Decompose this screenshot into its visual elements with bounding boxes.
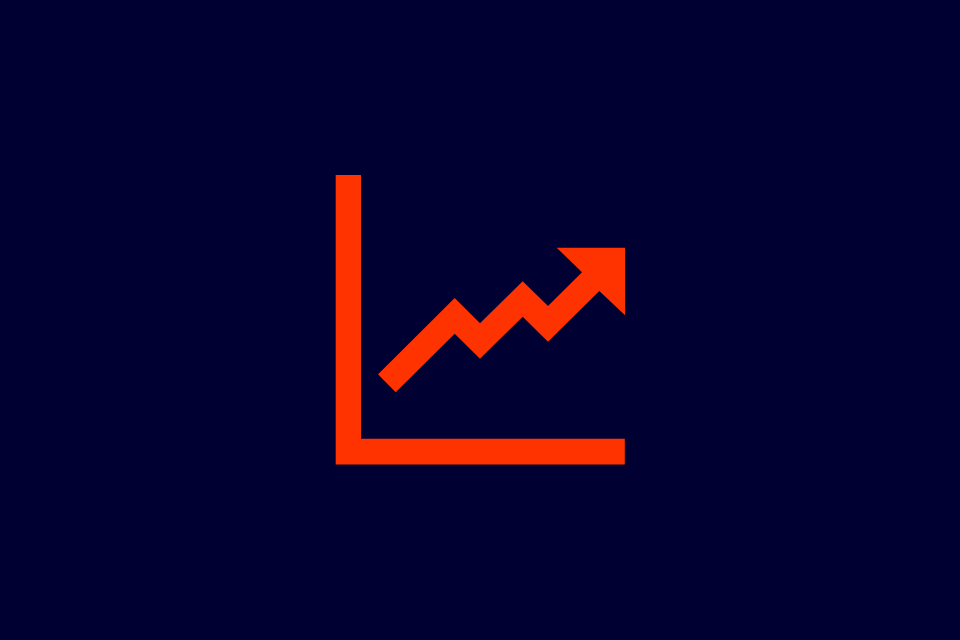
rising zigzag arrow — [378, 248, 625, 392]
chart axes — [336, 175, 625, 464]
